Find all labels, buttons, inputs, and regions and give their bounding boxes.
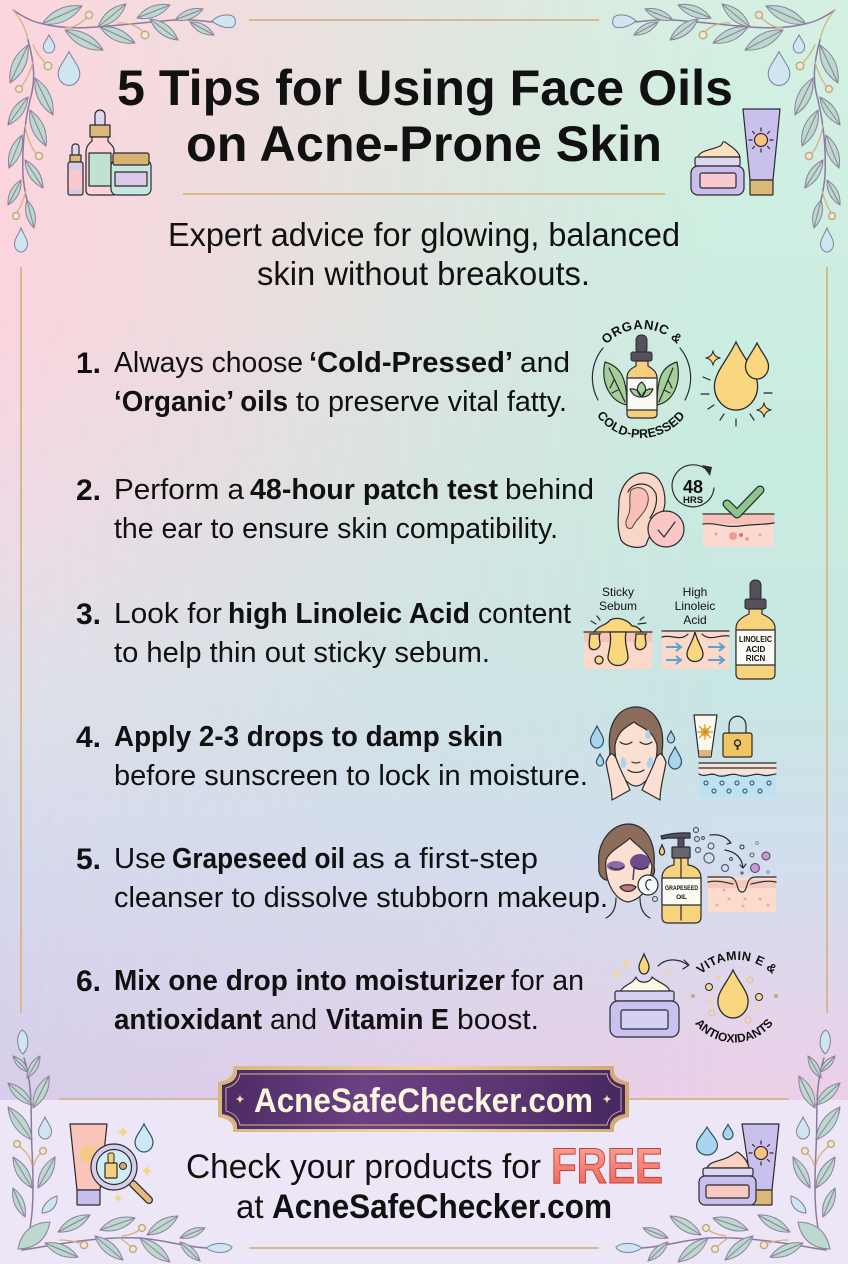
website badge: AcneSafeChecker.com <box>254 1082 593 1120</box>
tip 4 text <box>76 721 588 792</box>
decoration: top-right floral corner <box>613 4 840 252</box>
tip 4 text: before sunscreen to lock in moisture. <box>114 760 588 792</box>
subtitle <box>168 216 680 292</box>
icon: woman with smudged makeup and cotton pad <box>599 824 658 918</box>
footer panel background <box>0 1100 848 1264</box>
footer call to action: at <box>236 1188 264 1225</box>
title: on Acne-Prone Skin <box>186 116 662 172</box>
tip 2 text: the ear to ensure skin compatibility. <box>114 513 558 545</box>
tip 3 text: high Linoleic Acid <box>228 598 470 630</box>
tip 5 text: as a first-step <box>352 843 538 875</box>
icon: ear with check, 48 hour timer and skin check: HRS <box>683 495 703 506</box>
tip 3 text: Look for <box>114 598 223 630</box>
tip 1 text: to preserve vital fatty. <box>296 386 567 418</box>
footer call to action: Check your products for <box>186 1148 541 1186</box>
tip 1 text: Always choose <box>114 347 303 379</box>
website badge <box>218 1066 629 1132</box>
icon: sticky sebum pore <box>584 585 652 669</box>
title <box>117 60 733 172</box>
tip 5 text: Use <box>114 843 166 875</box>
decoration: top-left floral corner <box>8 4 235 252</box>
tip 6 text: antioxidant <box>114 1004 262 1036</box>
footer call to action: AcneSafeChecker.com <box>272 1188 612 1226</box>
icon: linoleic acid rich bottle: ACID <box>746 645 765 654</box>
icon: high linoleic acid pore: High <box>683 585 707 599</box>
tip 3 text: 3. <box>76 598 101 631</box>
subtitle: skin without breakouts. <box>257 255 590 292</box>
tip 2 text: 48-hour patch test <box>250 474 499 506</box>
tip 3 text: to help thin out sticky sebum. <box>114 637 490 669</box>
icon: vitamin E and antioxidants badge: ANTIOXIDANTS <box>694 1019 772 1043</box>
tip 4 text: Apply 2-3 drops to damp skin <box>114 721 503 753</box>
icon: high linoleic acid pore: Linoleic <box>675 599 715 613</box>
tip 6 text: Vitamin E <box>326 1004 449 1036</box>
icon: grapeseed oil pump bottle <box>659 833 701 923</box>
icon: serum bottles and jar <box>68 110 151 195</box>
decoration: bottom-left floral corner <box>8 1030 232 1262</box>
tip 6 text: and <box>270 1004 317 1036</box>
icon: bubbles clearing a pore <box>694 828 776 912</box>
tip 3 text <box>76 598 571 669</box>
icon: sunscreen, lock and hydrated skin layers <box>694 715 776 797</box>
footer call to action <box>186 1138 663 1226</box>
tip 2 text <box>76 474 594 545</box>
title: 5 Tips for Using Face Oils <box>117 60 733 116</box>
icon: high linoleic acid pore <box>662 585 729 669</box>
icon: ear with check, 48 hour timer and skin check: 48 <box>683 477 703 497</box>
icon: ear with check, 48 hour timer and skin check <box>618 465 774 547</box>
decoration: bottom-right floral corner <box>616 1030 840 1262</box>
icon: tube under magnifying glass <box>70 1124 153 1205</box>
tip 6 text <box>76 965 584 1036</box>
tip 2 text: behind <box>505 474 594 506</box>
tip 6 text: 6. <box>76 965 101 998</box>
tip 1 text: 1. <box>76 347 101 380</box>
icon: sticky sebum pore: Sticky <box>602 585 634 599</box>
free highlight: FREE <box>551 1138 663 1194</box>
tip 1 text: ‘Cold-Pressed’ <box>309 347 513 379</box>
icon: grapeseed oil pump bottle: OIL <box>676 894 687 901</box>
tip 3 text: content <box>478 598 571 630</box>
icon: grapeseed oil pump bottle: GRAPESEED <box>665 885 698 892</box>
icon: high linoleic acid pore: Acid <box>683 613 707 627</box>
tip 6 text: Mix one drop into moisturizer <box>114 965 505 997</box>
icon: organic cold-pressed oil bottle badge: ORGANIC & <box>602 320 681 344</box>
icon: woman patting water on face <box>591 707 681 800</box>
tip 5 text: Grapeseed oil <box>172 843 345 875</box>
tip 5 text: 5. <box>76 843 101 876</box>
icon: linoleic acid rich bottle <box>736 580 775 679</box>
tip 1 text: ‘Organic’ oils <box>114 386 288 418</box>
icon: linoleic acid rich bottle: RICN <box>746 654 765 663</box>
tip 5 text <box>76 843 608 914</box>
icon: sticky sebum pore: Sebum <box>599 599 637 613</box>
tip 5 text: cleanser to dissolve stubborn makeup. <box>114 882 608 914</box>
tip 1 text: and <box>520 347 570 379</box>
tip 4 text: 4. <box>76 721 101 754</box>
icon: linoleic acid rich bottle: LINOLEIC <box>739 635 772 644</box>
tip 1 text <box>76 347 570 418</box>
icon: moisturizer jar with oil drop <box>610 954 689 1037</box>
icon: vitamin E and antioxidants badge <box>691 951 778 1043</box>
tip 6 text: boost. <box>457 1004 539 1036</box>
icon: cream jar, tube and water drops <box>697 1124 779 1205</box>
tip 2 text: 2. <box>76 474 101 507</box>
icon: cream jar and sunscreen tube <box>691 109 780 195</box>
icon: organic cold-pressed oil bottle badge: COLD-PRESSED <box>598 412 684 438</box>
icon: golden oil drops with sparkles <box>701 342 772 426</box>
icon: organic cold-pressed oil bottle badge <box>592 320 692 438</box>
icon: vitamin E and antioxidants badge: VITAMIN E & <box>696 951 776 974</box>
subtitle: Expert advice for glowing, balanced <box>168 216 680 253</box>
tip 6 text: for an <box>511 965 584 997</box>
tip 2 text: Perform a <box>114 474 244 506</box>
